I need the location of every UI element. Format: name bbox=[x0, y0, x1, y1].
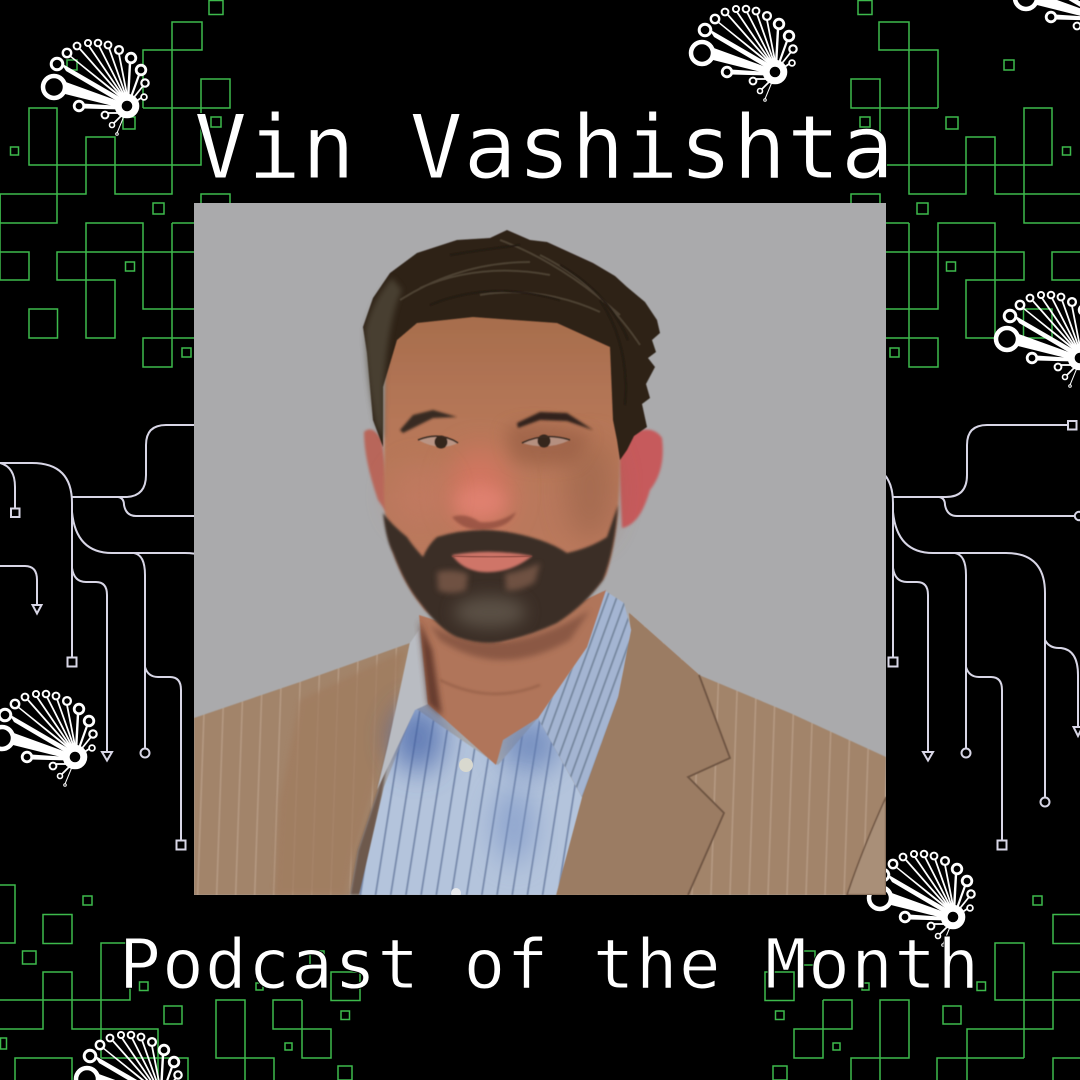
shirt bbox=[359, 708, 582, 895]
icon: brain right bbox=[996, 292, 1080, 387]
neck crease bbox=[440, 680, 540, 694]
lapel edge bbox=[688, 675, 730, 895]
face bbox=[384, 304, 620, 642]
neck shadow left bbox=[419, 620, 442, 716]
green circuit pattern: top right bbox=[851, 0, 1080, 367]
right eyebrow bbox=[517, 412, 593, 430]
chin skin right bbox=[505, 563, 540, 590]
right suit shoulder bbox=[556, 613, 886, 895]
shirt shadow left bbox=[392, 704, 444, 772]
subtitle: Podcast of the Month bbox=[119, 925, 979, 1005]
hair strands bbox=[400, 240, 640, 405]
chin skin left bbox=[437, 570, 468, 593]
shirt shadow centre bbox=[494, 787, 534, 863]
nose flush bbox=[448, 448, 512, 532]
icon: brain left bbox=[0, 691, 97, 786]
white circuit lines: right bbox=[761, 421, 1080, 850]
right eye bbox=[522, 434, 570, 448]
icon: brain top centre bbox=[691, 6, 797, 101]
neck bbox=[419, 590, 606, 765]
hair bbox=[363, 230, 660, 460]
right lapel bbox=[556, 613, 730, 895]
lower shirt button bbox=[451, 888, 461, 898]
neck shadow under beard bbox=[430, 610, 590, 660]
left lapel shading bbox=[275, 650, 405, 895]
title: Vin Vashishta bbox=[194, 96, 894, 199]
icon: brain top left bbox=[43, 40, 149, 135]
left cheek flush bbox=[394, 465, 446, 525]
hair grey side left bbox=[365, 278, 402, 440]
left eye bbox=[418, 436, 458, 448]
lip line bbox=[452, 556, 532, 557]
shirt button bbox=[459, 758, 473, 772]
green circuit pattern: bottom right bbox=[765, 885, 1080, 1080]
left collar bbox=[377, 630, 428, 790]
right collar bbox=[538, 590, 631, 797]
beard grey bbox=[454, 596, 526, 628]
green circuit pattern: top left bbox=[0, 0, 230, 367]
right ear bbox=[618, 429, 663, 528]
icon: brain top right corner bbox=[1015, 0, 1080, 46]
right cheek shade bbox=[566, 440, 614, 540]
lips bbox=[452, 552, 532, 572]
beard bbox=[383, 505, 618, 643]
left ear bbox=[364, 429, 392, 520]
nose shadow bbox=[452, 512, 516, 530]
eye socket shadow bbox=[505, 424, 590, 465]
left eyebrow bbox=[400, 410, 457, 433]
green circuit pattern: bottom left bbox=[0, 885, 360, 1080]
white circuit lines: left bbox=[0, 421, 262, 850]
icon: brain bottom left bbox=[76, 1032, 182, 1080]
nose tip bbox=[454, 485, 506, 519]
right sleeve bbox=[847, 797, 886, 895]
shirt shadow right bbox=[500, 717, 560, 773]
icon: brain bottom right bbox=[869, 851, 975, 946]
left suit shoulder bbox=[194, 643, 410, 895]
portrait photo bbox=[194, 203, 886, 895]
left lapel inner shadow bbox=[350, 730, 392, 895]
